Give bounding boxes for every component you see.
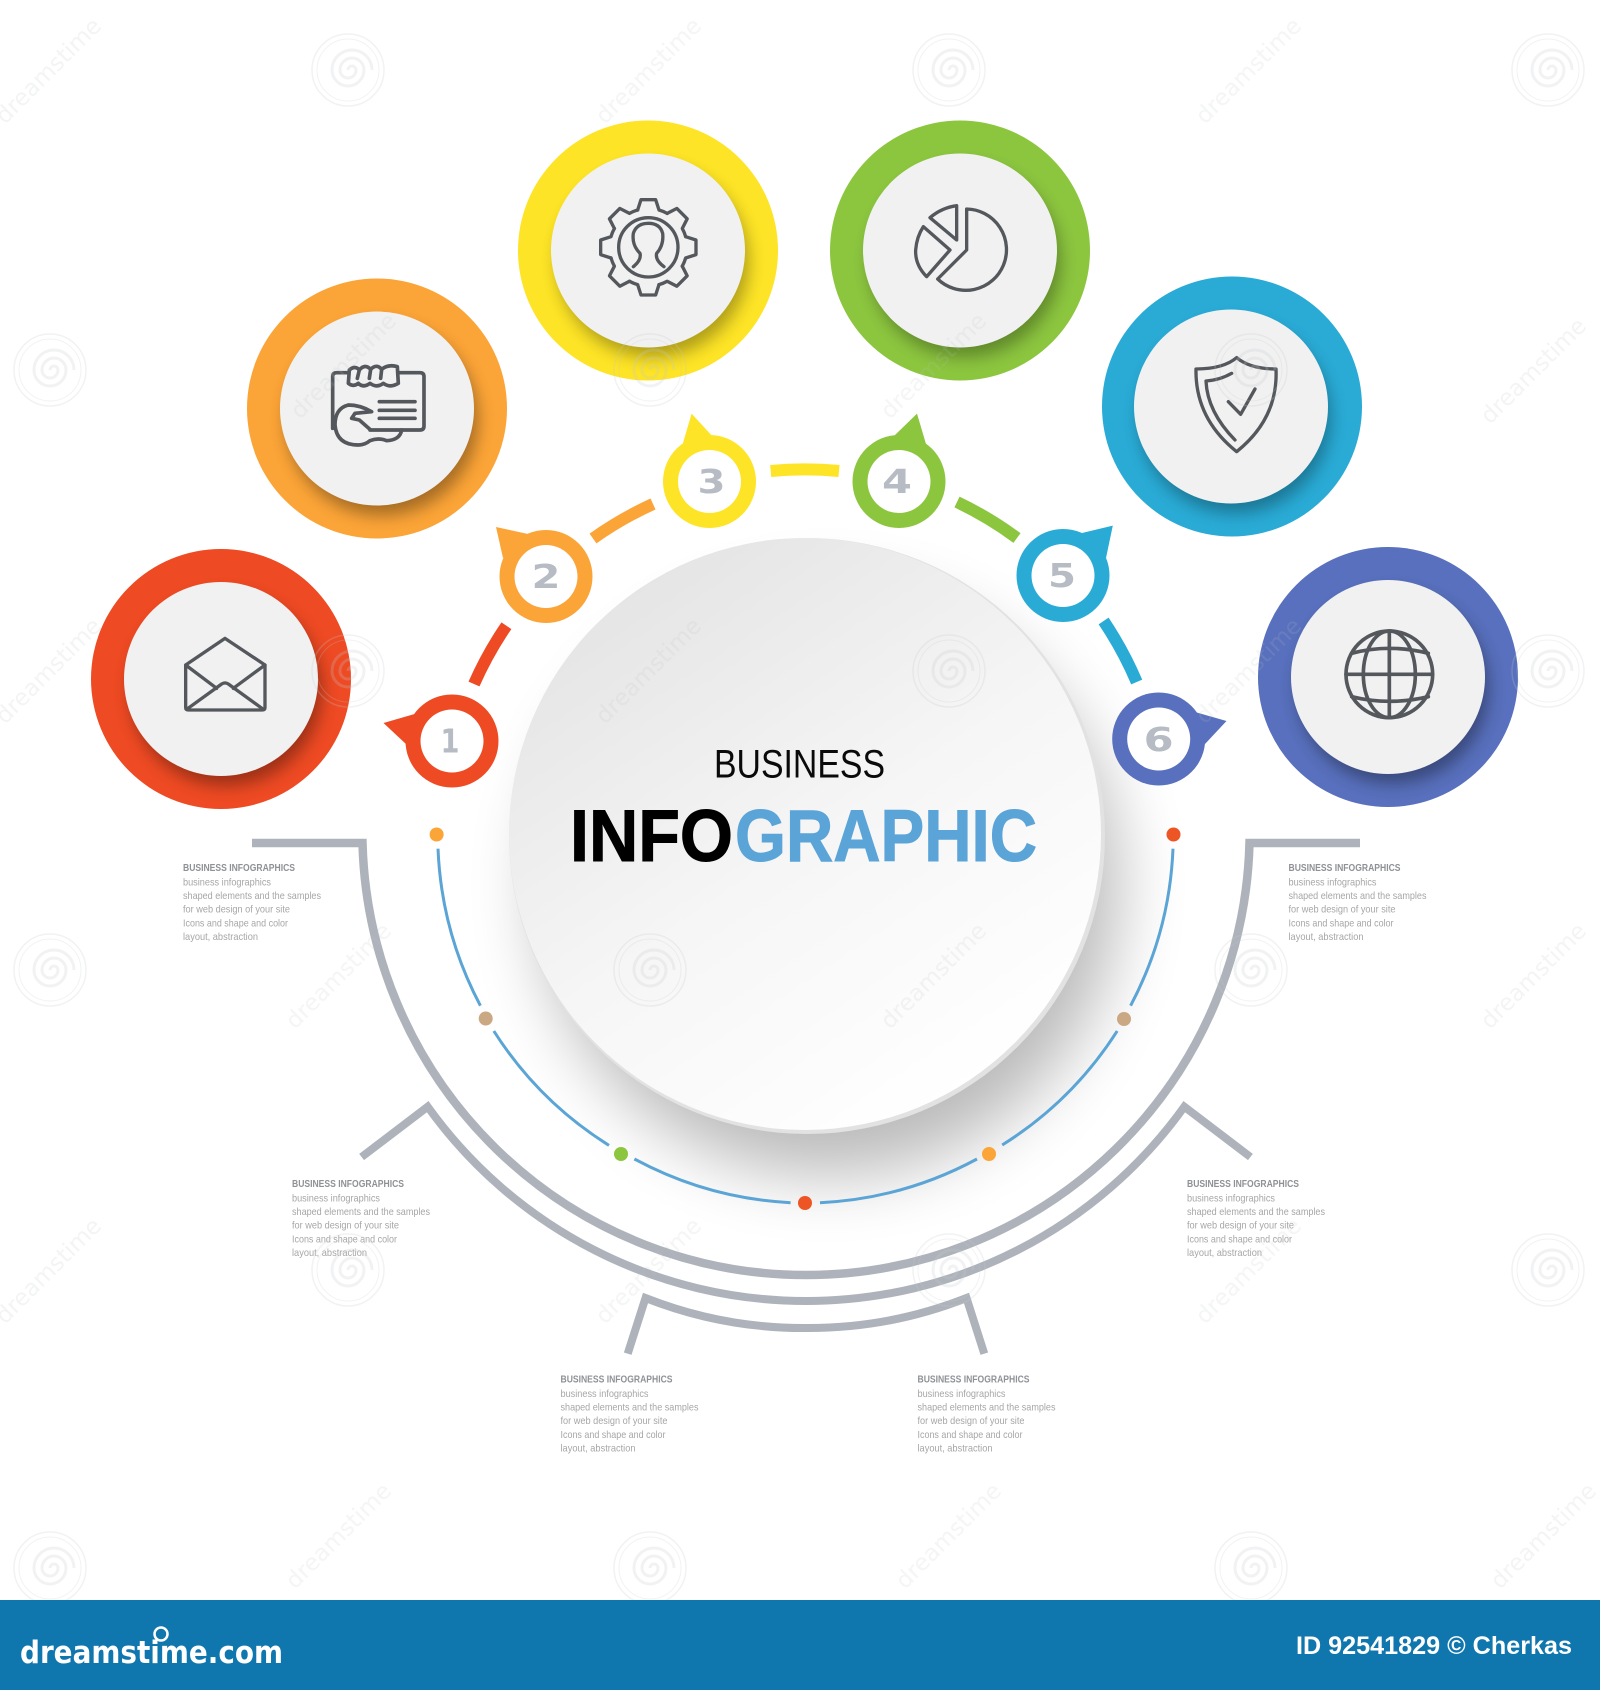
- logo spiral: [154, 1628, 168, 1640]
- pin 3: 3: [698, 462, 726, 501]
- text block 5: Icons and shape and color: [1187, 1233, 1292, 1245]
- watermark text: dreamstime: [891, 1478, 1007, 1594]
- watermark text: dreamstime: [286, 308, 402, 424]
- title: [570, 742, 1037, 877]
- pin 5: [1016, 526, 1113, 622]
- icon: shield with check: [1196, 358, 1276, 452]
- grey bracket arc 1: [252, 843, 1360, 1275]
- text block 1: [183, 862, 321, 943]
- title: GRAPHIC: [735, 796, 1037, 877]
- text block 4: [918, 1374, 1056, 1454]
- icon: envelope: [186, 638, 265, 710]
- text block 1: BUSINESS INFOGRAPHICS: [183, 862, 295, 874]
- center disc shadow: [538, 595, 1118, 1175]
- watermark text: dreamstime: [1476, 918, 1592, 1034]
- footer bar: [0, 1600, 1600, 1690]
- text block 6: BUSINESS INFOGRAPHICS: [1288, 862, 1400, 874]
- icon: globe: [1346, 631, 1433, 718]
- thin blue arc with dots: [430, 828, 1181, 1210]
- pin 4: [852, 414, 946, 528]
- text block 2: for web design of your site: [292, 1220, 399, 1232]
- text block 5: shaped elements and the samples: [1187, 1206, 1325, 1218]
- text block 4: shaped elements and the samples: [918, 1402, 1056, 1414]
- ring 3: gear: [518, 120, 778, 380]
- text block 3: [560, 1374, 698, 1454]
- watermark text: dreamstime: [281, 918, 397, 1034]
- watermark text: dreamstime: [281, 1478, 397, 1594]
- text block 4: BUSINESS INFOGRAPHICS: [918, 1374, 1030, 1386]
- text block 3: BUSINESS INFOGRAPHICS: [560, 1374, 672, 1386]
- text block 6: shaped elements and the samples: [1288, 890, 1426, 902]
- ring 1: envelope: [91, 549, 351, 809]
- text block 1: business infographics: [183, 876, 271, 888]
- text block 1: layout, abstraction: [183, 931, 258, 943]
- text block 6: business infographics: [1288, 876, 1376, 888]
- text block 4: business infographics: [918, 1388, 1006, 1400]
- text block 5: business infographics: [1187, 1192, 1275, 1204]
- text block 1: Icons and shape and color: [183, 917, 288, 929]
- text block 4: layout, abstraction: [918, 1442, 993, 1454]
- text block 2: business infographics: [292, 1192, 380, 1204]
- pin 1: 1: [440, 722, 460, 760]
- pin 4: 4: [882, 462, 912, 501]
- icon: pie chart: [916, 206, 1006, 290]
- ring 2: notepad: [247, 278, 507, 538]
- text block 6: for web design of your site: [1288, 904, 1396, 916]
- watermark text: dreamstime: [1191, 13, 1307, 129]
- watermark text: dreamstime: [1191, 613, 1307, 729]
- pin 6: 6: [1144, 720, 1174, 759]
- text block 2: layout, abstraction: [292, 1247, 367, 1259]
- text block 3: layout, abstraction: [560, 1442, 636, 1454]
- watermark text: dreamstime: [591, 13, 707, 129]
- text block 1: shaped elements and the samples: [183, 890, 321, 902]
- title: BUSINESS: [714, 742, 885, 786]
- center disc: [509, 538, 1105, 1134]
- text block 5: BUSINESS INFOGRAPHICS: [1187, 1178, 1299, 1190]
- image id and author: ID 92541829 © Cherkas: [1296, 1632, 1572, 1660]
- text block 2: BUSINESS INFOGRAPHICS: [292, 1178, 404, 1190]
- logo text: dreamstime.com: [20, 1635, 283, 1671]
- text block 5: [1187, 1178, 1325, 1259]
- watermark text: dreamstime: [876, 308, 992, 424]
- ring 6: globe: [1258, 547, 1518, 807]
- pin 3: [663, 414, 756, 528]
- text block 3: business infographics: [560, 1388, 648, 1400]
- text block 6: [1288, 862, 1426, 943]
- pin 1: [384, 694, 498, 788]
- text block 3: Icons and shape and color: [560, 1429, 666, 1441]
- text block 6: Icons and shape and color: [1288, 917, 1394, 929]
- text block 3: for web design of your site: [560, 1415, 668, 1427]
- icon: gear with person: [601, 200, 696, 295]
- text block 4: Icons and shape and color: [918, 1429, 1023, 1441]
- text block 2: [292, 1178, 430, 1259]
- text block 3: shaped elements and the samples: [560, 1402, 698, 1414]
- text block 1: for web design of your site: [183, 904, 290, 916]
- text block 2: shaped elements and the samples: [292, 1206, 430, 1218]
- pin 6: [1112, 692, 1226, 786]
- grey bracket arc 3: [628, 1298, 984, 1354]
- text block 5: layout, abstraction: [1187, 1247, 1262, 1259]
- text block 4: for web design of your site: [918, 1415, 1025, 1427]
- text block 5: for web design of your site: [1187, 1220, 1294, 1232]
- icon: notepad and hand: [333, 366, 424, 445]
- watermark text: dreamstime: [1476, 313, 1592, 429]
- watermark text: dreamstime: [1486, 1478, 1600, 1594]
- watermark text: dreamstime: [876, 918, 992, 1034]
- pin 2: 2: [532, 557, 560, 596]
- grey bracket arc 2: [362, 1107, 1250, 1301]
- watermark text: dreamstime: [591, 613, 707, 729]
- text block 6: layout, abstraction: [1288, 931, 1364, 943]
- text block 2: Icons and shape and color: [292, 1233, 397, 1245]
- pin 5: 5: [1048, 556, 1076, 595]
- ring 4: pie chart: [830, 120, 1090, 380]
- watermark text: dreamstime: [591, 1213, 707, 1329]
- connector arcs: [474, 469, 1137, 684]
- title: INFO: [570, 796, 733, 877]
- ring 5: shield: [1102, 276, 1362, 536]
- watermark text: dreamstime: [1191, 1213, 1307, 1329]
- pin 2: [496, 527, 592, 623]
